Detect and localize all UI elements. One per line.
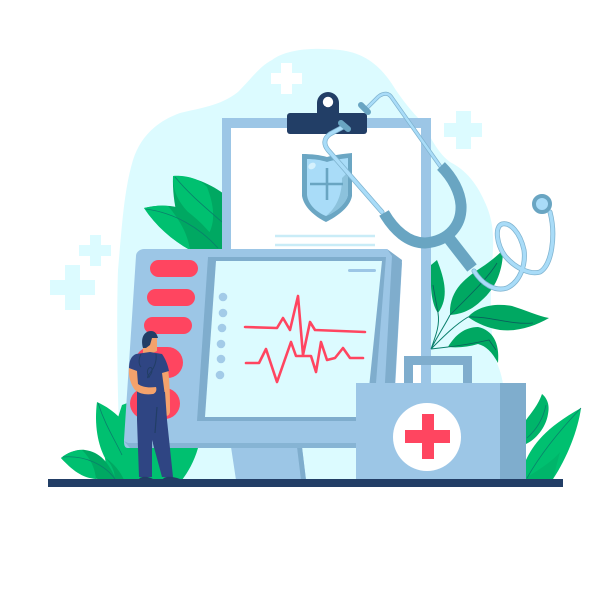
background blob: [117, 49, 504, 480]
coiled light tube: [474, 212, 553, 289]
shirt: [129, 352, 169, 396]
screen frame: [197, 257, 386, 421]
screen indicator bar: [348, 269, 376, 272]
decorative cross left small: [79, 235, 111, 266]
ground line: [48, 479, 563, 487]
clipboard right rail lower overlay: [421, 350, 431, 384]
decorative cross top: [271, 63, 302, 94]
doctor figure: [129, 331, 180, 479]
plant: top left leaves: [144, 176, 224, 250]
shoes: [139, 477, 180, 479]
tube from right earpiece: [366, 94, 440, 166]
shield icon: [302, 153, 352, 222]
earpieces: [341, 105, 368, 129]
right arm: [160, 368, 170, 416]
indicator dots: [216, 293, 227, 379]
ECG trace bottom: [246, 342, 363, 382]
clipboard: [222, 118, 431, 388]
stethoscope on chest: [139, 354, 156, 378]
Y stem: [444, 232, 472, 268]
plant: bottom left leaves: [61, 400, 198, 480]
neck and face: [143, 338, 157, 359]
hair: [142, 331, 158, 348]
stethoscope chestpiece: [534, 196, 550, 212]
document lines: [275, 236, 375, 245]
thick Y arc: [384, 166, 461, 243]
pants: [137, 392, 173, 477]
decorative cross right: [444, 111, 482, 149]
stethoscope: [325, 94, 553, 289]
plant: right branch leaves: [431, 250, 549, 363]
first aid kit: [356, 356, 526, 480]
monitor stand: [231, 447, 306, 480]
tube from left earpiece: [325, 127, 382, 212]
red status pills: [130, 260, 198, 419]
plant: bottom right leaves: [526, 394, 581, 479]
decorative cross left large: [50, 265, 95, 310]
screen: [205, 261, 382, 417]
ECG trace top: [245, 296, 365, 355]
left arm: [129, 368, 156, 394]
clipboard clip: [287, 92, 367, 134]
monitor: [124, 249, 402, 448]
